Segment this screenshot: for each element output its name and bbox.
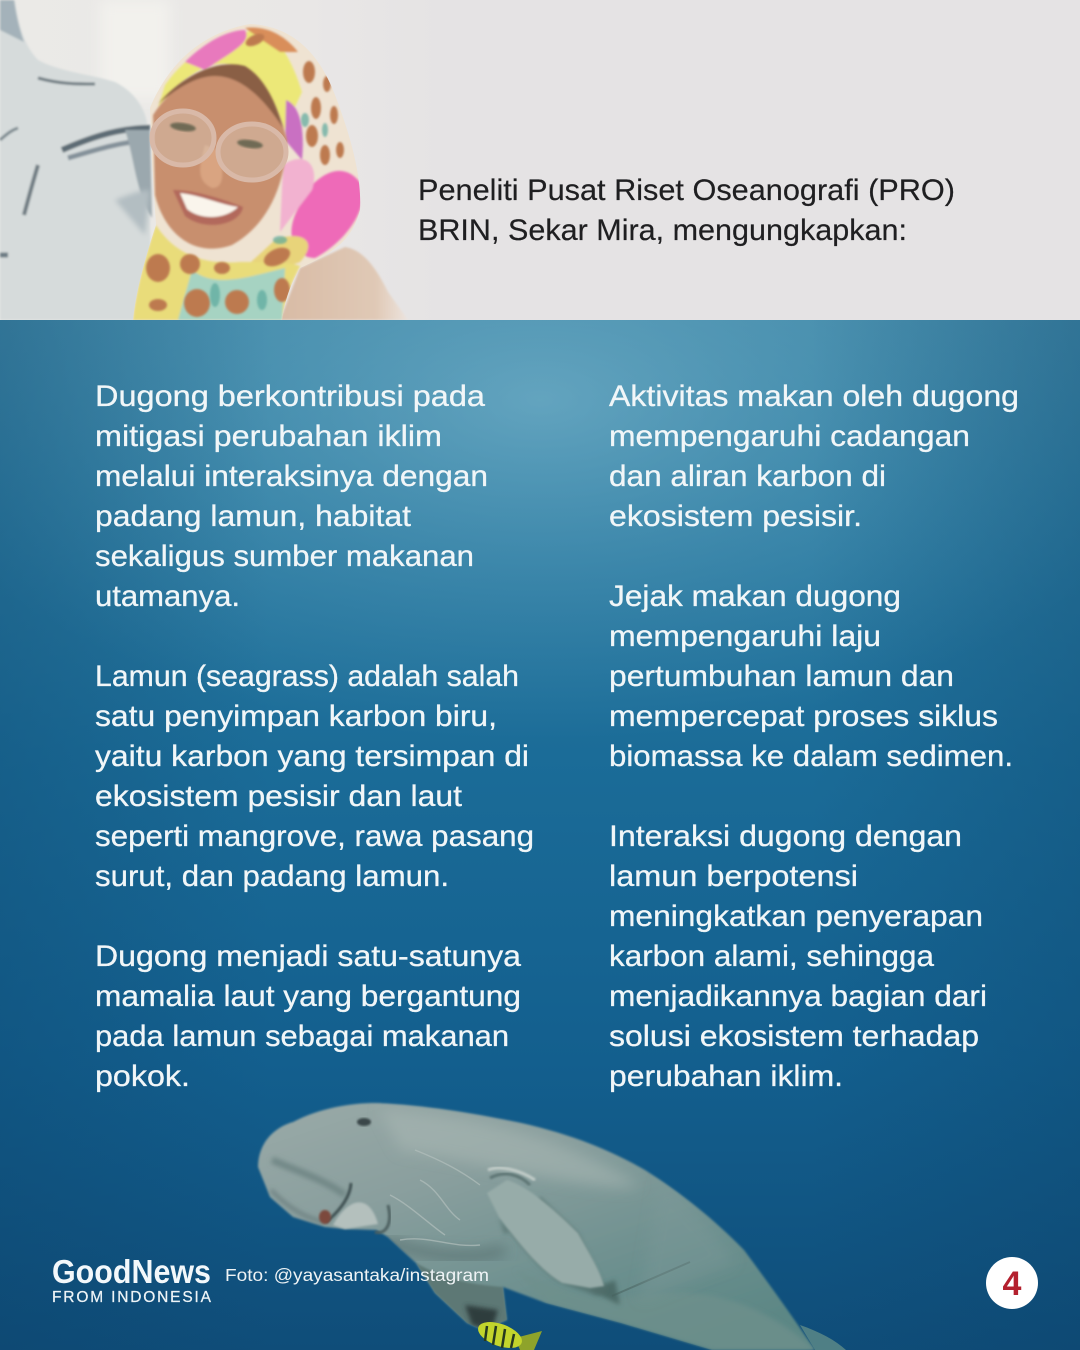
paragraph: dugong and climate mitigation: padang lamun, habitat [95,500,412,533]
text column: right [609,380,1019,1093]
neck creases [385,1240,505,1256]
text column: left [95,380,534,1093]
paragraph: only marine mammal: Dugong menjadi satu-satunya [95,940,521,973]
tail [800,1325,846,1350]
paragraph: seagrass blue carbon: surut, dan padang lamun. [95,860,449,893]
photo: researcher portrait [0,0,440,320]
quote introduction: BRIN, Sekar Mira, mengungkapkan: [418,214,907,247]
paragraph: feeding activity: ekosistem pesisir. [609,500,862,533]
paragraph: dugong and climate mitigation: utamanya. [95,580,240,613]
paragraph: seagrass blue carbon: ekosistem pesisir dan laut [95,780,463,813]
paragraph: dugong and climate mitigation: melalui interaksinya dengan [95,460,488,493]
paragraph: carbon absorption: meningkatkan penyerapan [609,900,983,933]
paragraph: only marine mammal: pada lamun sebagai makanan [95,1020,509,1053]
paragraph: feeding trails [609,580,1013,773]
paragraph: feeding activity: dan aliran karbon di [609,460,886,493]
lower flipper [416,1263,507,1330]
paragraph: feeding activity: Aktivitas makan oleh dugong [609,380,1019,413]
paragraph: seagrass blue carbon [95,660,534,893]
paragraph: feeding trails: mempercepat proses siklus [609,700,998,733]
logo: GoodNews from Indonesia [52,1253,212,1306]
quote introduction: Peneliti Pusat Riset Oseanografi (PRO) [418,174,955,207]
belly shading [543,1296,814,1350]
quote introduction [418,174,955,247]
paragraph: carbon absorption [609,820,987,1093]
paragraph: feeding activity: mempengaruhi cadangan [609,420,970,453]
paragraph: carbon absorption: perubahan iklim. [609,1060,843,1093]
paragraph: seagrass blue carbon: yaitu karbon yang tersimpan di [95,740,529,773]
fish [475,1317,542,1350]
glasses [152,111,286,180]
photo credit: Foto: @yayasantaka/instagram [225,1265,489,1285]
logo: GoodNews from Indonesia: FROM INDONESIA [52,1289,212,1306]
paragraph: dugong and climate mitigation: sekaligus sumber makanan [95,540,474,573]
back highlight [380,1110,640,1187]
paragraph: feeding trails: Jejak makan dugong [609,580,901,613]
smile [173,190,243,225]
paragraph: dugong and climate mitigation: mitigasi perubahan iklim [95,420,442,453]
paragraph: dugong and climate mitigation: Dugong berkontribusi pada [95,380,485,413]
hijab [130,20,370,320]
paragraph: feeding trails: biomassa ke dalam sedimen. [609,740,1013,773]
paragraph: carbon absorption: karbon alami, sehingga [609,940,934,973]
paragraph: carbon absorption: lamun berpotensi [609,860,858,893]
paragraph: feeding activity [609,380,1019,533]
illustration: dugong [258,1103,846,1350]
paragraph: carbon absorption: Interaksi dugong dengan [609,820,962,853]
paragraph: feeding trails: pertumbuhan lamun dan [609,660,954,693]
logo: GoodNews from Indonesia: GoodNews [52,1253,211,1290]
eye [357,1118,371,1126]
sculpture behind the researcher [0,0,152,320]
paragraph: seagrass blue carbon: satu penyimpan karbon biru, [95,700,497,733]
front flipper [499,1197,606,1296]
paragraph: seagrass blue carbon: Lamun (seagrass) adalah salah [95,660,519,693]
panel: header [0,0,1080,320]
page number badge [986,1257,1038,1309]
paragraph: only marine mammal: pokok. [95,1060,190,1093]
paragraph: carbon absorption: solusi ekosistem terhadap [609,1020,979,1053]
paragraph: feeding trails: mempengaruhi laju [609,620,881,653]
face [153,64,287,249]
page number badge: 4 [1003,1265,1022,1303]
snout and mouth [272,1160,345,1195]
paragraph: seagrass blue carbon: seperti mangrove, rawa pasang [95,820,534,853]
paragraph: only marine mammal: mamalia laut yang bergantung [95,980,521,1013]
paragraph: carbon absorption: menjadikannya bagian dari [609,980,987,1013]
shirt [280,247,408,320]
paragraph: only marine mammal [95,940,521,1093]
paragraph: dugong and climate mitigation [95,380,488,613]
